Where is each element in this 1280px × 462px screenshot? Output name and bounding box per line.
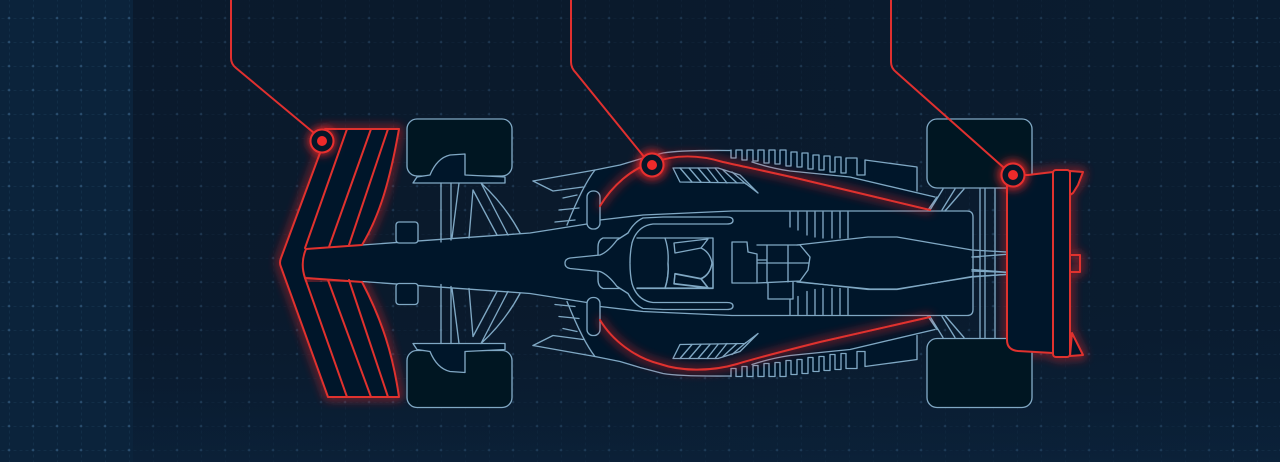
car blueprint <box>303 119 1032 408</box>
marker: sidepod <box>640 154 664 176</box>
engine cover lower line <box>797 271 1023 289</box>
marker glow <box>309 128 1027 189</box>
front wing outline <box>280 129 399 397</box>
front wing glow <box>280 129 399 397</box>
cockpit lower half <box>637 263 713 288</box>
rear wing body <box>1007 172 1053 353</box>
sidepod glow <box>600 156 930 370</box>
lower wing flaps <box>305 278 388 397</box>
marker: rear wing <box>1002 164 1024 186</box>
upper wing flaps <box>305 129 388 248</box>
upper half of car <box>303 119 1032 264</box>
sidepod red lines <box>600 156 930 370</box>
upper sidepod edge <box>600 156 930 210</box>
front wing <box>280 129 399 397</box>
rear axle lines <box>972 189 995 338</box>
callout line: rear wing <box>891 0 1003 167</box>
marker: front wing <box>310 130 334 152</box>
front wing fill <box>280 129 399 397</box>
callout line: sidepod <box>571 0 645 158</box>
rear wing <box>1007 170 1083 357</box>
lower sidepod edge <box>600 317 930 370</box>
rear wing main plane <box>1053 170 1070 357</box>
rear centre tab <box>1070 255 1080 272</box>
engine grid <box>732 242 810 299</box>
lower half of car <box>303 263 1032 408</box>
rear endplate top <box>1070 171 1083 195</box>
rear endplate bottom <box>1070 333 1083 356</box>
callout line: front wing <box>231 0 314 133</box>
rear wing glow <box>1007 171 1083 357</box>
